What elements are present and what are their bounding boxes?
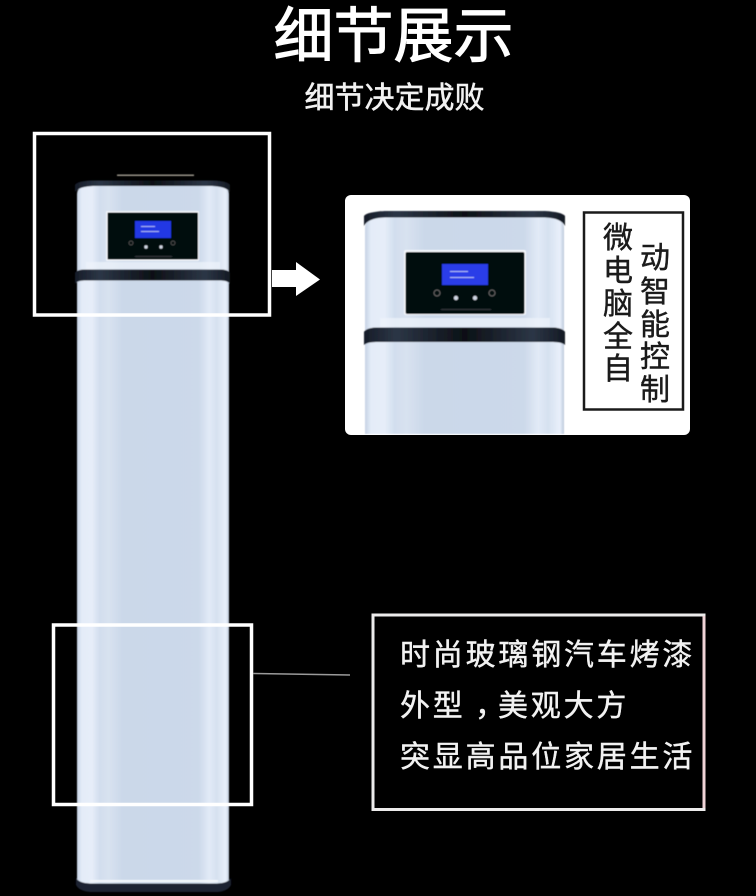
caption box: 自 [603,353,633,386]
caption box [584,212,683,410]
caption box: 能 [640,309,670,342]
callout [373,615,706,810]
product: water softener tower [75,174,231,892]
caption box: 控 [640,341,670,374]
highlight frame: top [34,134,270,315]
control display [106,211,199,261]
caption box: 全 [603,321,633,354]
caption box: 微 [603,222,633,255]
caption box: 电 [603,255,633,288]
callout: 外型 [400,690,466,723]
subtitle: 细节决定成败 [304,82,484,115]
callout: 时尚玻璃钢汽车烤漆 [400,639,695,672]
zoomed tower [364,211,565,434]
panel: detail zoom [345,195,690,435]
caption box: 智 [640,276,670,309]
caption box: 动 [640,242,670,275]
connector line [253,674,350,675]
callout: 美观大方 [498,690,629,723]
caption box: 制 [640,374,670,407]
arrow [272,262,320,296]
caption box: 脑 [603,288,633,321]
callout: 突显高品位家居生活 [400,741,695,774]
highlight frame: body [54,625,252,804]
callout: ， [475,690,508,723]
title: 细节展示 [274,3,514,70]
